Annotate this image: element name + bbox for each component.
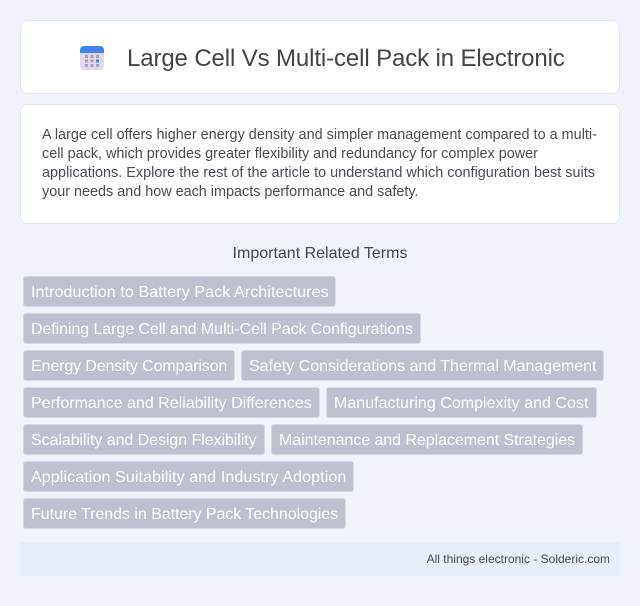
tag: Manufacturing Complexity and Cost <box>334 395 588 412</box>
tag <box>23 276 336 307</box>
tag <box>23 424 265 455</box>
tag: Defining Large Cell and Multi-Cell Pack Configurations <box>31 321 413 338</box>
tag list <box>23 276 604 529</box>
footer bar <box>20 542 620 576</box>
title: Large Cell Vs Multi-cell Pack in Electronic <box>127 45 565 72</box>
tag <box>23 498 346 529</box>
panel: header card <box>20 20 620 94</box>
tag: Introduction to Battery Pack Architectures <box>31 284 329 301</box>
tag <box>326 387 597 418</box>
heading: important related terms: Important Related Terms <box>233 245 407 262</box>
tag <box>241 350 604 381</box>
tag <box>23 313 421 344</box>
tag: Performance and Reliability Differences <box>31 395 312 412</box>
footer credit: All things electronic - Solderic.com <box>427 552 610 566</box>
icon: calendar <box>80 46 104 70</box>
tag: Energy Density Comparison <box>31 358 227 375</box>
panel: intro text card <box>20 104 620 224</box>
intro paragraph: applications. Explore the rest of the article to understand which configuration best suits <box>42 165 595 181</box>
tag: Application Suitability and Industry Adoption <box>31 469 346 486</box>
tag <box>23 350 235 381</box>
intro paragraph: A large cell offers higher energy density and simpler management compared to a multi- <box>42 127 597 143</box>
tag <box>23 387 320 418</box>
intro paragraph <box>42 127 597 200</box>
intro paragraph: your needs and how each impacts performance and safety. <box>42 184 419 200</box>
tag <box>23 461 354 492</box>
tag: Maintenance and Replacement Strategies <box>279 432 575 449</box>
tag: Future Trends in Battery Pack Technologies <box>31 506 338 523</box>
tag <box>271 424 583 455</box>
tag: Safety Considerations and Thermal Management <box>249 358 596 375</box>
tag: Scalability and Design Flexibility <box>31 432 257 449</box>
intro paragraph: cell pack, which provides greater flexibility and redundancy for complex power <box>42 146 538 162</box>
